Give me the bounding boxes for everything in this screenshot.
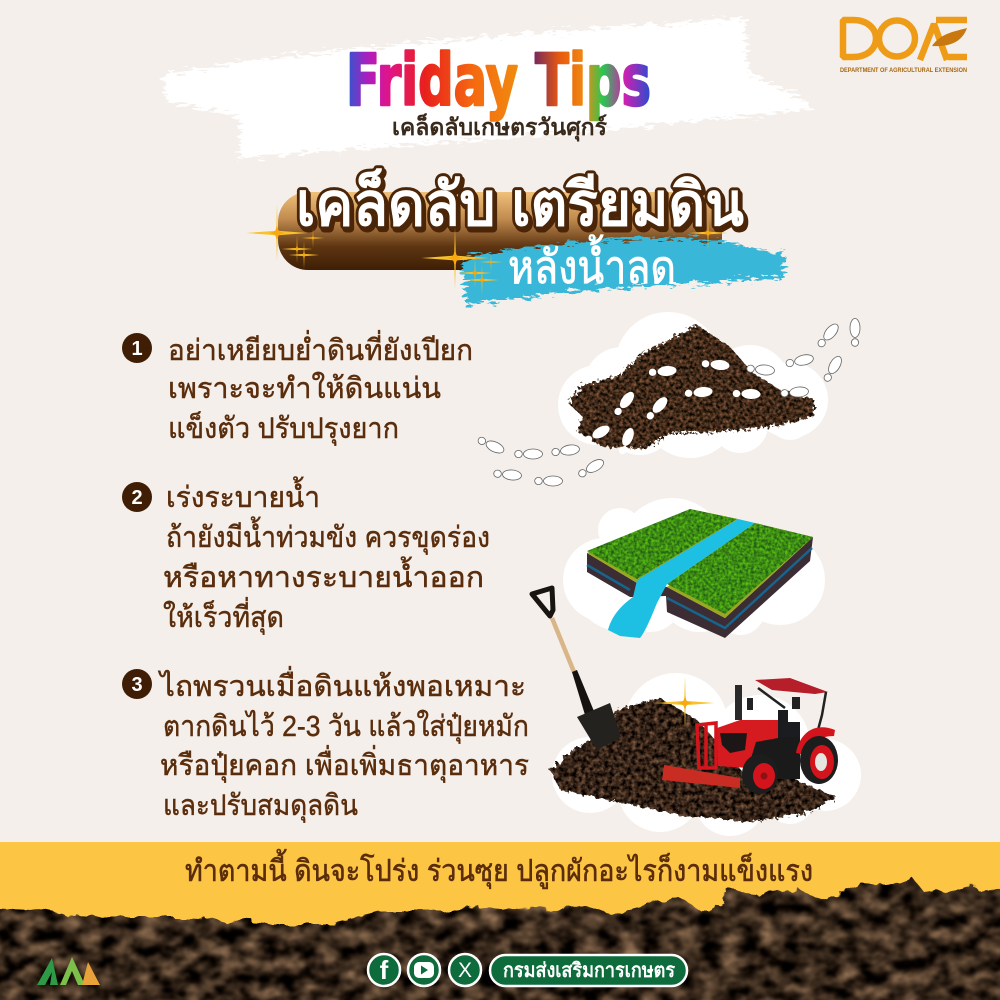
front frame — [697, 723, 716, 768]
small green logo — [37, 957, 100, 985]
number badge 2 — [122, 482, 152, 512]
title: Friday Tips: Friday Tips — [346, 39, 651, 122]
tip 1 text: เพราะจะทำให้ดินแน่น — [168, 371, 441, 405]
tip 3 text — [158, 666, 529, 823]
tip 1 — [122, 330, 473, 446]
agency name pill — [490, 955, 687, 986]
headline text: เคล็ดลับ เตรียมดิน — [296, 168, 744, 238]
tip 3 text: ไถพรวนเมื่อดินแห้งพอเหมาะ — [158, 666, 526, 703]
water channel — [608, 519, 755, 638]
yellow banner — [0, 842, 1000, 952]
number badge 2: 2 — [131, 487, 143, 509]
tip 2 text — [163, 476, 490, 635]
logo leaf — [932, 28, 967, 46]
logo mark — [843, 20, 967, 60]
facebook icon — [368, 954, 400, 986]
cloud 1 — [558, 312, 828, 458]
blue brush stroke — [462, 238, 786, 305]
tip 2 — [122, 476, 490, 635]
grass plot sides — [587, 537, 813, 638]
soil pile 3 — [550, 698, 837, 822]
blue soil layer — [587, 548, 812, 628]
illustration: grass plots with drainage channel — [563, 498, 825, 638]
mirrors — [747, 697, 800, 710]
logo caption: DEPARTMENT OF AGRICULTURAL EXTENSION — [840, 68, 967, 74]
soil pile 1 — [568, 325, 815, 448]
logo middle peak — [60, 957, 85, 985]
shovel — [532, 588, 621, 750]
logo peaks — [37, 958, 58, 985]
bottom soil band — [0, 877, 1000, 1000]
tip 2 text: ให้เร็วที่สุด — [163, 597, 284, 635]
seat and cabin — [750, 710, 800, 740]
sparkle on soil — [656, 676, 714, 730]
facebook icon: f — [380, 955, 389, 985]
logo right peak — [82, 962, 100, 985]
shovel blade — [577, 703, 621, 750]
tip 1 text — [168, 330, 473, 446]
subtitle: เคล็ดลับเกษตรวันศุกร์ — [392, 112, 608, 142]
tip 3 text: หรือปุ๋ยคอก เพื่อเพิ่มธาตุอาหาร — [160, 745, 529, 783]
shovel shaft — [552, 618, 574, 672]
left grass plot — [587, 509, 738, 583]
tip 2 text: หรือหาทางระบายน้ำออก — [163, 556, 484, 594]
white brush stroke behind title — [165, 18, 812, 158]
dozer blade — [662, 765, 740, 788]
tip 3 — [122, 666, 529, 823]
tractor — [662, 678, 838, 794]
illustration: shovel and tractor on soil — [532, 588, 861, 836]
number badge 3: 3 — [131, 674, 143, 696]
brown gradient pill — [278, 192, 722, 270]
tip 2 text: ถ้ายังมีน้ำท่วมขัง ควรขุดร่อง — [166, 516, 490, 555]
headline banner — [246, 168, 786, 305]
tractor hood — [717, 720, 778, 768]
rear wheel — [800, 736, 838, 784]
banner message: ทำตามนี้ ดินจะโปร่ง ร่วนซุย ปลูกผักอะไรก็งามแข็งแรง — [185, 849, 813, 890]
tip 3 text: และปรับสมดุลดิน — [163, 790, 358, 823]
logo: DOAE — [840, 20, 967, 74]
outlined footprints — [476, 318, 860, 486]
tractor grille — [720, 733, 747, 753]
rear fender — [796, 727, 835, 755]
canopy posts — [758, 688, 826, 730]
agency name pill: กรมส่งเสริมการเกษตร — [503, 960, 675, 982]
illustration: soil pile with footprints — [476, 312, 860, 486]
shovel grip — [532, 588, 553, 616]
tip 2 text: เร่งระบายน้ำ — [166, 476, 320, 514]
tip 1 text: อย่าเหยียบย่ำดินที่ยังเปียก — [168, 330, 473, 367]
engine dark — [748, 737, 800, 779]
exhaust — [735, 685, 742, 720]
tip 1 text: แข็งตัว ปรับปรุงยาก — [168, 410, 399, 446]
blue brush text: หลังน้ำลด — [508, 234, 676, 293]
shovel neck — [572, 670, 603, 738]
sparkles — [246, 204, 728, 296]
number badge 3 — [122, 669, 152, 699]
footprints on the pile — [583, 358, 761, 456]
social links — [368, 954, 687, 986]
tip 3 text: ตากดินไว้ 2-3 วัน แล้วใส่ปุ๋ยหมัก — [163, 709, 529, 744]
number badge 1 — [122, 333, 152, 363]
x icon: X — [458, 959, 472, 982]
tractor canopy — [755, 678, 828, 694]
number badge 1: 1 — [131, 338, 143, 360]
x icon — [449, 954, 481, 986]
cloud 3 — [552, 673, 861, 836]
youtube icon — [408, 954, 440, 986]
cloud 2 — [563, 498, 825, 635]
front wheel — [742, 754, 778, 794]
right grass plot — [667, 523, 813, 618]
